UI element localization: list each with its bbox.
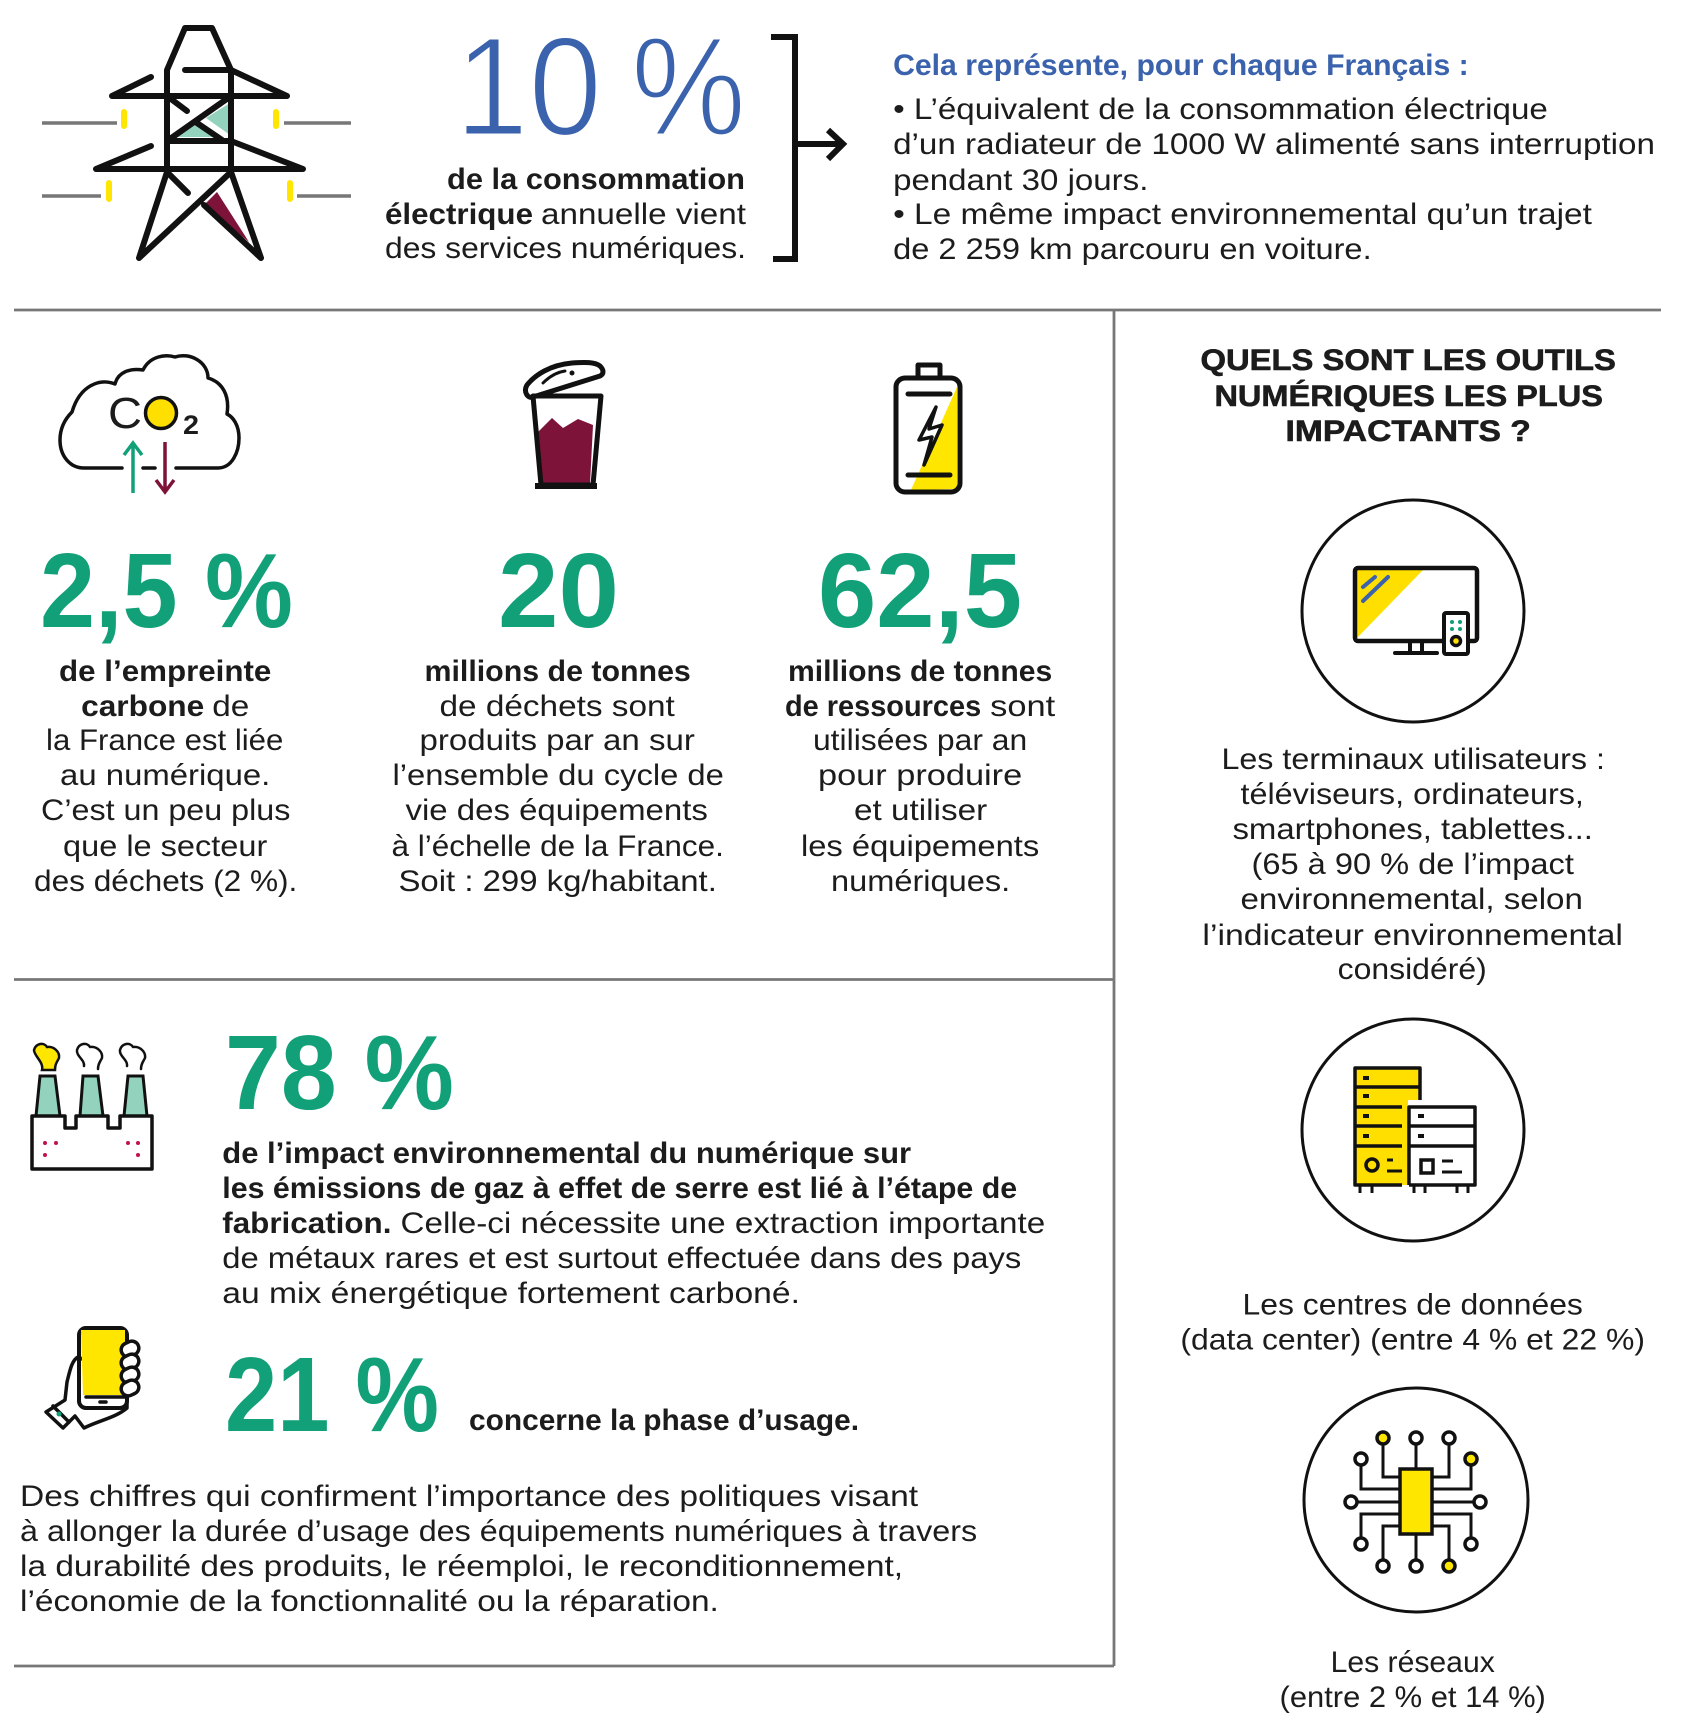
stat: 20: l’ensemble du cycle de [392, 759, 724, 792]
stat: 21 %: 21 % [225, 1336, 439, 1454]
stat: 62,5: pour produire [818, 759, 1022, 792]
icon: servers in circle [1302, 1019, 1524, 1241]
text: per French person: d’un radiateur de 1000 W alimenté sans interruption [893, 128, 1655, 161]
stat: 78 %: de métaux rares et est surtout effectuée dans des pays [222, 1242, 1021, 1275]
stat: 78 %: 78 % [225, 1014, 454, 1132]
stat: 2,5 %: au numérique. [60, 759, 270, 792]
stat: 2,5 %: 2,5 % [40, 532, 293, 650]
text: data centers: (data center) (entre 4 % et 22 %) [1180, 1324, 1645, 1357]
bracket arrow [771, 37, 843, 259]
icon: television in circle [1302, 500, 1524, 722]
icon: network chip in circle [1304, 1388, 1528, 1612]
stat: 78 % [222, 1014, 1045, 1310]
icon: hand holding phone [46, 1328, 141, 1428]
heading: most impactful tools: NUMÉRIQUES LES PLUS [1214, 379, 1603, 413]
text: electricity consumption: annuelle vient [541, 198, 747, 231]
text: conclusion paragraph: la durabilité des produits, le réemploi, le reconditionnement, [20, 1550, 903, 1583]
text: per French person: • Le même impact environnemental qu’un trajet [893, 198, 1593, 231]
heading: most impactful tools: IMPACTANTS ? [1286, 415, 1531, 448]
stat: 20: produits par an sur [420, 724, 695, 757]
heading: most impactful tools: QUELS SONT LES OUTILS [1200, 344, 1616, 377]
text: electricity consumption: des services numériques. [385, 232, 746, 265]
text: conclusion paragraph: à allonger la durée d’usage des équipements numériques à travers [20, 1515, 977, 1548]
stat: 20 [391, 532, 724, 898]
text: user devices: environnemental, selon [1240, 883, 1583, 916]
stat: 20: de déchets sont [440, 690, 676, 723]
big number: 10 %: 10 [455, 7, 602, 165]
stat: 20: Soit : 299 kg/habitant. [398, 865, 717, 898]
stat: 2,5 %: C’est un peu plus [41, 794, 290, 827]
stat: 21 %: concerne la phase d’usage. [469, 1404, 859, 1437]
text: user devices: considéré) [1338, 953, 1487, 986]
stat: 78 %: au mix énergétique fortement carboné. [222, 1277, 800, 1310]
stat: 78 %: Celle-ci nécessite une extraction importante [400, 1207, 1045, 1240]
stat: 2,5 %: la France est liée [46, 724, 283, 757]
stat: 2,5 % [34, 532, 297, 898]
big number: 10 %: % [631, 7, 746, 165]
text: per French person: pendant 30 jours. [893, 164, 1148, 197]
stat: 2,5 %: carbone [81, 690, 204, 723]
stat: 62,5: les équipements [801, 830, 1039, 863]
stat: 20: millions de tonnes [425, 655, 691, 688]
text: electricity consumption [385, 163, 747, 265]
stat: 62,5: numériques. [831, 865, 1010, 898]
stat: 78 %: fabrication. [222, 1207, 391, 1240]
text: user devices: Les terminaux utilisateurs : [1221, 743, 1605, 776]
stat: 78 %: les émissions de gaz à effet de serre est lié à l’étape de [222, 1172, 1017, 1205]
big number: 10 % [455, 7, 746, 165]
stat: 62,5: de ressources [785, 690, 981, 723]
text: per French person [893, 49, 1655, 266]
stat: 78 %: de l’impact environnemental du numérique sur [222, 1137, 911, 1170]
stat: 20: à l’échelle de la France. [391, 830, 724, 863]
text: data centers [1180, 1289, 1645, 1357]
icon: waste bin [526, 362, 603, 486]
text: conclusion paragraph [20, 1480, 977, 1618]
stat: 62,5: utilisées par an [813, 724, 1027, 757]
stat: 20: 20 [498, 532, 619, 650]
stat: 2,5 %: de l’empreinte [59, 655, 271, 688]
text: networks [1280, 1646, 1546, 1714]
stat: 62,5: 62,5 [818, 532, 1022, 650]
text: user devices: (65 à 90 % de l’impact [1251, 848, 1575, 881]
heading: most impactful tools [1200, 344, 1616, 448]
text: user devices: smartphones, tablettes... [1232, 813, 1593, 846]
text: per French person: Cela représente, pour chaque Français : [893, 49, 1469, 82]
stat: 2,5 %: que le secteur [63, 830, 267, 863]
icon: CO2 cloud: 2 [183, 410, 199, 440]
icon: electricity pylon [42, 28, 351, 258]
icon: factory [32, 1044, 152, 1169]
text: data centers: Les centres de données [1242, 1289, 1583, 1322]
text: networks: Les réseaux [1331, 1646, 1495, 1679]
stat: 62,5: sont [990, 690, 1056, 723]
icon: CO2 cloud [60, 356, 239, 493]
stat: 62,5: millions de tonnes [788, 655, 1052, 688]
text: user devices [1202, 743, 1623, 986]
text: electricity consumption: de la consommation [447, 163, 745, 196]
icon: battery [896, 365, 960, 492]
text: conclusion paragraph: l’économie de la fonctionnalité ou la réparation. [20, 1585, 719, 1618]
text: per French person: • L’équivalent de la consommation électrique [893, 93, 1548, 126]
stat: 62,5 [785, 532, 1056, 898]
text: user devices: téléviseurs, ordinateurs, [1240, 778, 1584, 811]
stat: 20: vie des équipements [405, 794, 708, 827]
stat: 2,5 %: de [212, 690, 249, 723]
text: per French person: de 2 259 km parcouru en voiture. [893, 233, 1372, 266]
icon: CO2 cloud: C [108, 389, 142, 438]
text: user devices: l’indicateur environnemental [1202, 919, 1623, 952]
stat: 2,5 %: des déchets (2 %). [34, 865, 297, 898]
text: networks: (entre 2 % et 14 %) [1280, 1681, 1546, 1714]
text: electricity consumption: électrique [385, 198, 533, 231]
text: conclusion paragraph: Des chiffres qui confirment l’importance des politiques visant [20, 1480, 919, 1513]
stat: 62,5: et utiliser [854, 794, 987, 827]
stat: 21 % [225, 1336, 859, 1454]
